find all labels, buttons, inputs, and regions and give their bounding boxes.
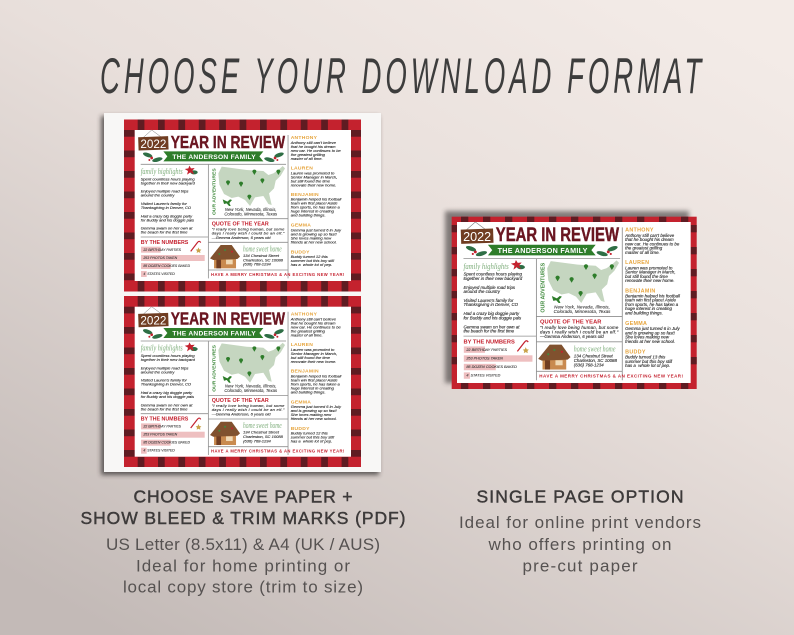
heading: single page option: SINGLE PAGE OPTION bbox=[476, 486, 684, 506]
text block: home sweet home address: 134 Chestnut Street bbox=[243, 430, 280, 435]
heading: save paper option: SHOW BLEED & TRIM MARKS (PDF) bbox=[80, 508, 406, 528]
text block: home sweet home address: home sweet home bbox=[243, 244, 282, 253]
section: by the numbers: 85 DOZEN COOKIES BAKED bbox=[143, 441, 191, 445]
icon: holly left bbox=[142, 151, 163, 163]
column: family members: ANTHONY bbox=[291, 135, 318, 141]
column: family members: new car. He continues to be bbox=[291, 148, 341, 153]
banner: family name: THE ANDERSON FAMILY bbox=[498, 247, 588, 255]
column: family members: and is growing up so fast! bbox=[291, 231, 337, 236]
column: family members: GEMMA bbox=[625, 321, 647, 327]
dividers bbox=[463, 227, 622, 380]
greeting: HAVE A MERRY CHRISTMAS & AN EXCITING NEW YEAR! bbox=[539, 374, 684, 379]
icon: poinsettia bbox=[185, 342, 198, 351]
section: by the numbers: BY THE NUMBERS bbox=[463, 340, 515, 346]
column: family members: that he bought his dream bbox=[625, 237, 674, 242]
sign: 2022: 2022 bbox=[140, 314, 167, 328]
text block: family highlights: family highlights bbox=[463, 261, 509, 271]
text block: family highlights: Had a crazy big doggie party bbox=[141, 390, 193, 395]
caption: states visited: New York, Nevada, Illinois, bbox=[225, 207, 277, 212]
column: family members: and building things. bbox=[625, 310, 663, 315]
section: quote of the year: —Gemma Anderson, 6 years old bbox=[539, 334, 604, 339]
column: family members: from sports, he has taken a bbox=[291, 381, 340, 386]
column: family members: Anthony still can't believe bbox=[290, 140, 337, 145]
text block: family highlights: the beach for the first time bbox=[141, 230, 188, 235]
column: family members: Buddy turned 13 this bbox=[625, 355, 666, 360]
text block: home sweet home address: (636) 768-1234 bbox=[574, 363, 604, 368]
column: family members: master of all time. bbox=[291, 333, 323, 338]
text block: save paper details: local copy store (trim to size) bbox=[123, 578, 363, 596]
column: family members: team win first place! Aside bbox=[291, 201, 338, 206]
column: family members: Anthony still can't believe bbox=[624, 233, 675, 238]
section: quote of the year: days I really wish I could be an elf." bbox=[212, 230, 285, 235]
text block: home sweet home address: Charleston, SC 10088 bbox=[574, 358, 617, 363]
column: family members: and is growing up so fast! bbox=[291, 408, 337, 413]
column: family members: that he bought his dream bbox=[291, 144, 336, 149]
column: family members: LAUREN bbox=[625, 260, 649, 266]
banner: family name bbox=[163, 328, 263, 338]
sign: 2022 bbox=[138, 307, 169, 328]
text block: family highlights: together in their new backyard bbox=[463, 276, 523, 281]
section: by the numbers: 22 BIRTHDAY PARTIES bbox=[142, 248, 182, 252]
column: family members: summer but this boy still bbox=[291, 258, 334, 263]
text block: family highlights: Thanksgiving in Denver, CO bbox=[141, 382, 192, 387]
section: quote of the year: "I really love being human, but some bbox=[540, 325, 619, 330]
column: family members: ANTHONY bbox=[291, 312, 318, 318]
icon: gingerbread house bbox=[210, 245, 240, 268]
text block: family highlights: for Buddy and his doggie pals bbox=[141, 217, 194, 222]
column: family members: renovate their new home. bbox=[291, 182, 336, 187]
section: by the numbers bbox=[463, 340, 532, 379]
column: family members: team win first place! Aside bbox=[291, 377, 338, 382]
icon: holly right bbox=[264, 151, 284, 163]
text block: family highlights: Gemma swam on her own at bbox=[463, 324, 520, 329]
text block: family highlights: Enjoyed multiple road trips bbox=[141, 189, 188, 194]
sign: 2022: 2022 bbox=[463, 229, 491, 244]
column: family members: Senior Manager in March, bbox=[625, 270, 676, 275]
text block: family highlights: Enjoyed multiple road trips bbox=[463, 285, 516, 290]
column: family members: Gemma just turned 6 in July bbox=[291, 227, 342, 232]
column: family members: the greatest grilling bbox=[625, 246, 663, 251]
column: family members: BENJAMIN bbox=[625, 288, 656, 294]
banner: family name bbox=[163, 151, 263, 161]
dividers bbox=[141, 135, 288, 278]
section: by the numbers: 85 DOZEN COOKIES BAKED bbox=[466, 365, 517, 369]
text block: family highlights: around the country bbox=[141, 369, 175, 374]
column: family members: GEMMA bbox=[291, 399, 311, 405]
text block: home sweet home address bbox=[243, 244, 284, 267]
column: family members: new car. He continues to be bbox=[291, 325, 341, 330]
column: family members: BENJAMIN bbox=[291, 192, 319, 198]
column: family members: from sports, he has taken a bbox=[291, 205, 340, 210]
column: family members: Gemma just turned 6 in July bbox=[625, 326, 681, 331]
icon: candy cane bbox=[191, 418, 201, 430]
section: by the numbers: 253 PHOTOS TAKEN bbox=[465, 357, 503, 361]
column: family members: from sports, he has taken a bbox=[625, 302, 679, 307]
section: by the numbers: 22 BIRTHDAY PARTIES bbox=[142, 425, 182, 429]
column: family members: has a whole lot of pep. bbox=[625, 363, 670, 368]
text block: home sweet home address: home sweet home bbox=[243, 421, 282, 430]
icon: gingerbread house bbox=[538, 345, 571, 370]
section: quote of the year: days I really wish I could be an elf." bbox=[540, 329, 619, 334]
column: family members: Lauren was promoted to bbox=[291, 170, 335, 175]
section: quote of the year: QUOTE OF THE YEAR bbox=[212, 221, 269, 227]
caption: states visited: Colorado, Minnesota, Texas bbox=[224, 211, 277, 216]
column: family members: She loves making new bbox=[291, 412, 332, 417]
text block: save paper details: US Letter (8.5x11) & A4 (UK / AUS) bbox=[106, 535, 380, 554]
column: family members: has a whole lot of pep. bbox=[291, 262, 332, 267]
column: family members: huge interest in creating bbox=[291, 385, 335, 390]
section: by the numbers: 85 DOZEN COOKIES BAKED bbox=[143, 264, 191, 268]
text block: family highlights: Visited Lauren's family for bbox=[141, 378, 187, 383]
column: family members: BENJAMIN bbox=[291, 369, 319, 375]
text block: family highlights: Gemma swam on her own at bbox=[141, 402, 193, 407]
icon: poinsettia bbox=[185, 166, 198, 175]
column: family members: and is growing up so fast! bbox=[625, 330, 676, 335]
text block: home sweet home address bbox=[574, 343, 617, 368]
text block: home sweet home address: 134 Chestnut Street bbox=[243, 253, 280, 258]
text block: family highlights: family highlights bbox=[141, 167, 183, 176]
caption: states visited: Colorado, Minnesota, Texas bbox=[554, 309, 611, 314]
text block: family highlights: the beach for the first time bbox=[141, 406, 188, 411]
greeting: HAVE A MERRY CHRISTMAS & AN EXCITING NEW YEAR! bbox=[211, 449, 344, 454]
heading: save paper option: CHOOSE SAVE PAPER + bbox=[134, 486, 352, 506]
column: family members: Gemma just turned 6 in July bbox=[291, 404, 342, 409]
section: by the numbers: BY THE NUMBERS bbox=[141, 240, 189, 246]
banner: family name: THE ANDERSON FAMILY bbox=[172, 331, 256, 338]
column: family members: friends at her new school. bbox=[291, 416, 337, 421]
section: quote of the year: QUOTE OF THE YEAR bbox=[212, 398, 269, 404]
text block: single page details: Ideal for online print vendors bbox=[459, 513, 701, 532]
section: quote of the year: days I really wish I could be an elf." bbox=[212, 407, 285, 412]
column: family members: master of all time. bbox=[291, 156, 323, 161]
text block: family highlights: together in their new backyard bbox=[141, 180, 196, 185]
map: usa with pins bbox=[547, 260, 619, 303]
column: family members: and building things. bbox=[291, 389, 326, 394]
banner: family name: THE ANDERSON FAMILY bbox=[172, 154, 256, 161]
column: family members: team win first place! Aside bbox=[625, 298, 676, 303]
sign: 2022: 2022 bbox=[140, 137, 167, 151]
section: quote of the year bbox=[539, 320, 619, 339]
text block: family highlights bbox=[141, 167, 196, 235]
section: quote of the year: QUOTE OF THE YEAR bbox=[540, 320, 602, 326]
text block: home sweet home address bbox=[243, 421, 284, 443]
title: CHOOSE YOUR DOWNLOAD FORMAT bbox=[100, 47, 703, 104]
column: family members: new car. He continues to be bbox=[625, 241, 680, 246]
column: family members: Buddy turned 12 this bbox=[291, 431, 328, 436]
text block: single page details: pre-cut paper bbox=[522, 556, 638, 576]
sign: 2022 bbox=[461, 222, 494, 244]
text block: save paper details bbox=[106, 535, 380, 596]
column: family members: renovate their new home. bbox=[291, 359, 336, 364]
column: family members: but still found the time bbox=[291, 355, 331, 360]
column: family members: BUDDY bbox=[291, 249, 310, 255]
text block: family highlights: for Buddy and his doggie pals bbox=[463, 315, 522, 320]
section: by the numbers: 253 PHOTOS TAKEN bbox=[142, 433, 178, 437]
text block: family highlights: around the country bbox=[141, 193, 175, 198]
text block: family highlights: around the country bbox=[463, 289, 501, 294]
text block: single page details bbox=[459, 513, 701, 576]
column: family members: has a whole lot of pep. bbox=[291, 439, 332, 444]
column: family members: but still found the time bbox=[291, 178, 331, 183]
text block: save paper details: Ideal for home printing or bbox=[136, 556, 350, 576]
section: by the numbers bbox=[141, 417, 205, 454]
text block: family highlights: Spent countless hours playing bbox=[141, 353, 195, 358]
column: family members: the greatest grilling bbox=[291, 329, 326, 334]
icon: candy cane bbox=[191, 241, 201, 253]
text block: family highlights: Thanksgiving in Denver, CO bbox=[463, 302, 519, 307]
text block: family highlights bbox=[141, 344, 196, 411]
caption: states visited bbox=[224, 384, 277, 393]
text block: home sweet home address: 134 Chestnut Street bbox=[574, 353, 614, 358]
column: family members: the greatest grilling bbox=[291, 152, 326, 157]
text block: family highlights: Had a crazy big doggie party bbox=[463, 311, 520, 316]
column: family members: friends at her new school. bbox=[625, 339, 675, 344]
text block: family highlights: Spent countless hours playing bbox=[463, 272, 523, 277]
section: quote of the year bbox=[211, 221, 285, 240]
column: family members: Benjamin helped his football bbox=[291, 373, 341, 378]
heading: year in review: YEAR IN REVIEW bbox=[496, 225, 620, 246]
text block: home sweet home address: home sweet home bbox=[574, 343, 615, 353]
column: family members: Anthony still can't believe bbox=[290, 317, 337, 322]
column: family members: huge interest in creating bbox=[291, 209, 335, 214]
text block: family highlights: Thanksgiving in Denver, CO bbox=[141, 205, 192, 210]
section: by the numbers: 4 STATES VISITED bbox=[143, 449, 175, 453]
column: family members bbox=[290, 135, 342, 267]
column: family members: BUDDY bbox=[291, 426, 310, 432]
sign: 2022 bbox=[138, 130, 169, 151]
heading: year in review: YEAR IN REVIEW bbox=[171, 132, 285, 152]
text block: family highlights: Had a crazy big doggie party bbox=[141, 213, 193, 218]
text block: home sweet home address: (636) 768-1234 bbox=[243, 438, 271, 443]
caption: states visited: New York, Nevada, Illinois, bbox=[554, 304, 610, 309]
greeting: HAVE A MERRY CHRISTMAS & AN EXCITING NEW YEAR! bbox=[211, 272, 344, 277]
column: family members: GEMMA bbox=[291, 223, 311, 229]
column: family members: huge interest in creating bbox=[625, 306, 673, 311]
section: by the numbers: 4 STATES VISITED bbox=[143, 272, 175, 276]
section: quote of the year bbox=[211, 398, 285, 417]
section: by the numbers bbox=[141, 240, 205, 277]
card: bottom year in review bbox=[124, 296, 361, 467]
banner: family name bbox=[488, 245, 596, 255]
column: family members: Buddy turned 12 this bbox=[291, 254, 328, 259]
column: family members: but still found the time bbox=[625, 274, 668, 279]
caption: states visited: Colorado, Minnesota, Texas bbox=[224, 388, 277, 393]
text block: family highlights: Gemma swam on her own at bbox=[141, 226, 193, 231]
column: family members: summer but this boy still bbox=[291, 435, 334, 440]
column: family members: ANTHONY bbox=[625, 228, 654, 234]
section: quote of the year: "I really love being human, but some bbox=[212, 403, 285, 408]
column: family members: Benjamin helped his football bbox=[625, 293, 681, 298]
column: family members: friends at her new school. bbox=[291, 239, 337, 244]
column: family members bbox=[624, 228, 681, 368]
label: our adventures: OUR ADVENTURES bbox=[212, 168, 218, 215]
caption: states visited bbox=[554, 304, 611, 314]
column: family members: Lauren was promoted to bbox=[625, 265, 673, 270]
map: usa with pins bbox=[218, 343, 285, 383]
text block: family highlights: for Buddy and his doggie pals bbox=[141, 394, 194, 399]
column: family members bbox=[290, 312, 342, 444]
text block: family highlights: Enjoyed multiple road trips bbox=[141, 365, 188, 370]
text block: family highlights: the beach for the first time bbox=[463, 329, 515, 334]
section: by the numbers: 4 STATES VISITED bbox=[466, 374, 501, 378]
dividers bbox=[141, 312, 288, 455]
map: usa with pins bbox=[218, 166, 285, 206]
label: our adventures: OUR ADVENTURES bbox=[540, 262, 546, 313]
caption: states visited bbox=[224, 207, 277, 216]
column: family members: She loves making new bbox=[625, 335, 670, 340]
column: family members: BUDDY bbox=[625, 350, 646, 356]
icon: gingerbread house bbox=[210, 422, 240, 445]
column: family members: She loves making new bbox=[291, 235, 332, 240]
card: top year in review bbox=[124, 120, 361, 292]
section: by the numbers: 22 BIRTHDAY PARTIES bbox=[465, 348, 508, 352]
text block: family highlights bbox=[463, 261, 523, 334]
icon: holly right bbox=[264, 328, 284, 340]
panel: save paper sheet bbox=[101, 113, 381, 475]
column: family members: master of all time. bbox=[625, 250, 660, 255]
column: family members: Senior Manager in March, bbox=[291, 351, 337, 356]
label: our adventures: OUR ADVENTURES bbox=[212, 344, 218, 392]
heading: save paper option bbox=[80, 486, 406, 528]
section: by the numbers: 253 PHOTOS TAKEN bbox=[142, 256, 178, 260]
column: family members: LAUREN bbox=[291, 342, 313, 348]
section: quote of the year: —Gemma Anderson, 6 years old bbox=[211, 235, 271, 240]
section: quote of the year: "I really love being human, but some bbox=[212, 226, 285, 231]
text block: family highlights: family highlights bbox=[141, 344, 183, 353]
column: family members: summer but this boy still bbox=[625, 359, 673, 364]
column: family members: Senior Manager in March, bbox=[291, 174, 337, 179]
text block: home sweet home address: (636) 768-1234 bbox=[243, 262, 271, 267]
column: family members: Benjamin helped his football bbox=[291, 197, 341, 202]
icon: holly left bbox=[142, 328, 163, 340]
column: family members: and building things. bbox=[291, 213, 326, 218]
text block: family highlights: together in their new backyard bbox=[141, 357, 196, 362]
section: quote of the year: —Gemma Anderson, 6 years old bbox=[211, 412, 271, 417]
text block: family highlights: Visited Lauren's family for bbox=[141, 201, 187, 206]
text block: home sweet home address: Charleston, SC 10088 bbox=[243, 434, 284, 439]
icon: holly right bbox=[596, 245, 618, 257]
caption: states visited: New York, Nevada, Illinois, bbox=[225, 384, 277, 389]
panel: single page card bbox=[445, 211, 697, 389]
section: by the numbers: BY THE NUMBERS bbox=[141, 417, 189, 423]
text block: family highlights: Visited Lauren's family for bbox=[463, 298, 514, 303]
heading: year in review: YEAR IN REVIEW bbox=[171, 309, 285, 329]
icon: poinsettia bbox=[511, 260, 525, 270]
text block: family highlights: Spent countless hours playing bbox=[141, 176, 195, 181]
column: family members: renovate their new home. bbox=[625, 278, 675, 283]
icon: holly left bbox=[465, 245, 488, 257]
text block: home sweet home address: Charleston, SC 10088 bbox=[243, 257, 284, 262]
text block: single page details: who offers printing on bbox=[488, 535, 672, 554]
column: family members: Lauren was promoted to bbox=[291, 347, 335, 352]
icon: candy cane bbox=[517, 341, 529, 353]
column: family members: that he bought his dream bbox=[291, 321, 336, 326]
column: family members: LAUREN bbox=[291, 165, 313, 171]
